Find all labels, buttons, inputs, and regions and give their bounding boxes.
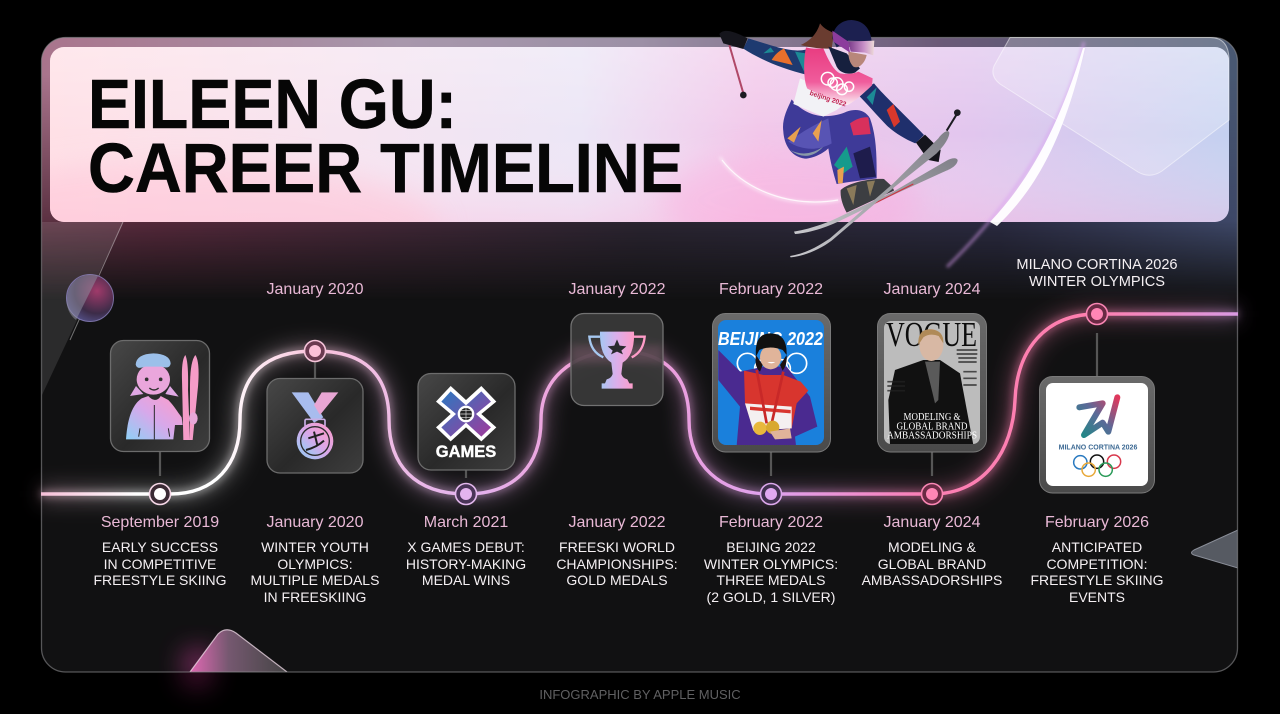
milestone: February 2026: COMPETITION:: [1046, 556, 1148, 572]
hair: [801, 23, 834, 49]
milestone: February 2026: [1030, 514, 1164, 605]
vest: [804, 47, 873, 105]
milestone: January 2022: [556, 514, 678, 588]
ski boots: [841, 179, 894, 213]
glass triangle right: [1192, 530, 1238, 568]
card: trophy icon: [571, 314, 663, 406]
milestone: September 2019: EARLY SUCCESS: [102, 539, 218, 555]
pole left: [729, 45, 743, 93]
glass shape top right: [993, 38, 1229, 175]
card: Vogue cover: MODELING &: [904, 411, 961, 423]
upper date labels: January 2024: [884, 281, 981, 298]
milestone: January 2024: GLOBAL BRAND: [878, 556, 986, 572]
pink glow at panel bottom: [183, 658, 211, 686]
card: Vogue cover: VOGUE: [886, 315, 977, 354]
milestone: March 2021: [406, 514, 526, 588]
card: Milano Cortina logo: MILANO CORTINA 2026: [1059, 444, 1137, 452]
milestone: September 2019: [93, 514, 227, 588]
light arc behind skier: [720, 157, 840, 203]
glove right: [916, 135, 941, 162]
panel: header banner: [50, 47, 1229, 222]
collar: [828, 47, 860, 74]
upper date labels: February 2022: [719, 281, 823, 298]
arm left: [743, 38, 807, 75]
pole right: [947, 113, 957, 131]
milestone: February 2026: February 2026: [1045, 514, 1149, 531]
milestone: January 2022: January 2022: [569, 514, 666, 531]
glass triangle bottom: [190, 630, 287, 672]
milestone: January 2020: OLYMPICS:: [277, 556, 353, 572]
upper label: Milano Cortina: MILANO CORTINA 2026: [1016, 257, 1178, 273]
timeline nodes: [150, 304, 1108, 504]
upper date labels: January 2022: [569, 281, 666, 298]
milestone: January 2020: January 2020: [267, 514, 364, 531]
milestone: March 2021: X GAMES DEBUT:: [407, 539, 525, 555]
milestone: January 2020: [251, 514, 379, 605]
milestone: January 2022: FREESKI WORLD: [559, 539, 675, 555]
milestone: January 2024: January 2024: [884, 514, 981, 531]
milestone: February 2026: ANTICIPATED: [1052, 539, 1142, 555]
card: Vogue cover: GLOBAL BRAND: [896, 420, 968, 432]
card: Beijing 2022 photo: BEIJING 2022: [718, 328, 824, 349]
ski 2: [790, 131, 949, 257]
milestone: January 2020: IN FREESKIING: [264, 589, 366, 605]
face: [848, 52, 867, 67]
timeline path: [41, 314, 1238, 494]
arm right: [857, 83, 924, 143]
upper date labels: [267, 281, 981, 298]
milestone: January 2024: MODELING &: [888, 539, 977, 555]
olympic rings on vest: [821, 72, 854, 95]
milestone: March 2021: HISTORY-MAKING: [406, 556, 526, 572]
upper date labels: January 2020: [267, 281, 364, 298]
milestone: September 2019: IN COMPETITIVE: [104, 556, 216, 572]
glass triangle top left: [42, 222, 123, 395]
milestone: September 2019: September 2019: [101, 514, 219, 531]
bib text: beijing 2022: [809, 90, 847, 109]
footer credit: INFOGRAPHIC BY APPLE MUSIC: [539, 687, 741, 702]
pants: [783, 99, 877, 184]
card: medal icon: [267, 378, 363, 473]
pink inner glow bottom: [185, 651, 211, 677]
goggle strap: [832, 31, 850, 53]
title: [88, 65, 683, 207]
milestone: January 2022: CHAMPIONSHIPS:: [556, 556, 678, 572]
light streak right: [947, 42, 1085, 267]
connector stems: [160, 333, 1097, 478]
milestone: February 2022: [704, 514, 838, 605]
milestone: September 2019: FREESTYLE SKIING: [93, 572, 227, 588]
card: Vogue cover: AMBASSADORSHIPS: [887, 430, 977, 442]
card: X Games logo: GAMES: [436, 443, 496, 461]
card: Vogue cover: [878, 314, 986, 452]
card: Beijing 2022 photo: [712, 314, 830, 452]
milestone: January 2024: [862, 514, 1002, 588]
upper label: Milano Cortina: WINTER OLYMPICS: [1029, 274, 1165, 290]
card: X Games logo: [418, 374, 515, 470]
milestone: February 2022: (2 GOLD, 1 SILVER): [707, 589, 835, 605]
milestone: February 2022: THREE MEDALS: [717, 572, 825, 588]
milestone: February 2026: EVENTS: [1069, 589, 1125, 605]
milestone: January 2024: AMBASSADORSHIPS: [862, 572, 1002, 588]
milestone: January 2022: GOLD MEDALS: [566, 572, 668, 588]
ski 1: [794, 158, 958, 234]
glove left: [719, 31, 748, 49]
upper label: Milano Cortina: [1016, 257, 1178, 290]
milestone: February 2022: February 2022: [719, 514, 823, 531]
milestone: March 2021: March 2021: [424, 514, 508, 531]
milestone: January 2020: MULTIPLE MEDALS: [251, 572, 379, 588]
goggles: [848, 41, 874, 55]
card: Milano Cortina logo: [1040, 376, 1154, 493]
icon: glass orb: [66, 274, 114, 322]
milestone: February 2022: BEIJING 2022: [726, 539, 816, 555]
milestone: March 2021: MEDAL WINS: [422, 572, 510, 588]
card: skier girl icon: [110, 340, 210, 452]
milestone: February 2022: WINTER OLYMPICS:: [704, 556, 838, 572]
title: EILEEN GU:: [88, 65, 457, 143]
photo: skier: [719, 20, 961, 257]
bib: [793, 78, 850, 117]
milestone: February 2026: FREESTYLE SKIING: [1030, 572, 1164, 588]
helmet: [832, 20, 872, 47]
milestone: January 2020: WINTER YOUTH: [261, 539, 369, 555]
title: CAREER TIMELINE: [88, 129, 683, 207]
